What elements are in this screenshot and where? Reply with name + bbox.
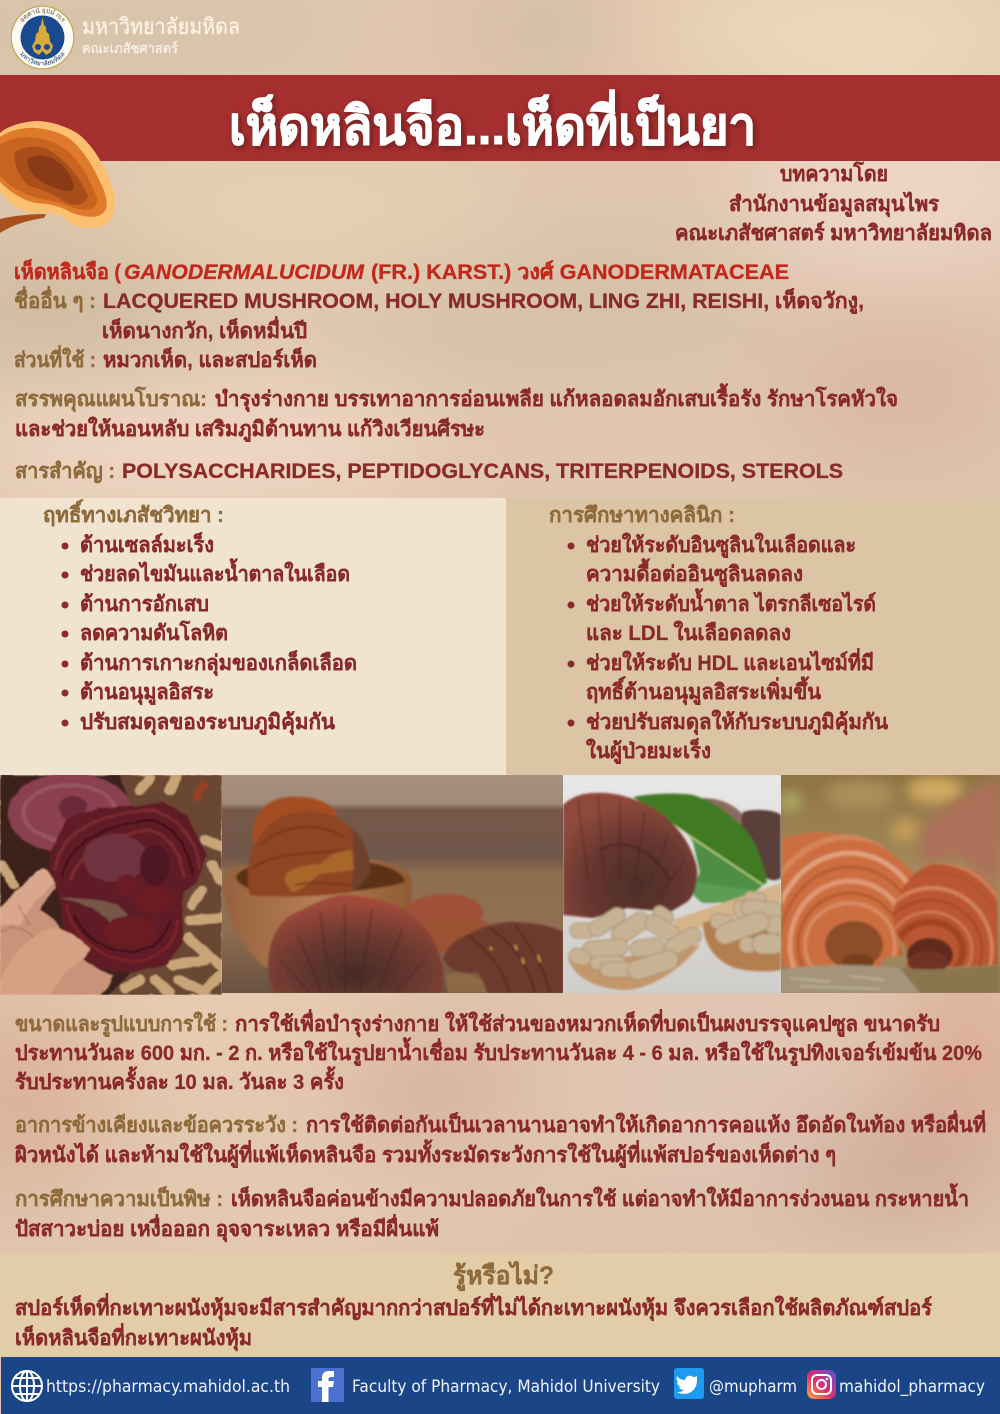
panel: clinical studies: การศึกษาทางคลินิก : [549, 504, 735, 527]
title banner [0, 75, 1000, 161]
photo: hand holding reishi [0, 773, 222, 995]
panel: pharmacology: ต้านเซลล์มะเร็ง [80, 531, 214, 557]
panel: clinical studies: ในผู้ป่วยมะเร็ง [586, 737, 711, 765]
panel: pharmacology: ช่วยลดไขมันและน้ำตาลในเลือด [80, 558, 350, 586]
usage and safety text: การศึกษาความเป็นพิษ : [15, 1185, 223, 1211]
panel: pharmacology: ต้านการเกาะกลุ่มของเกล็ดเลือด [80, 649, 357, 677]
credit: คณะเภสัชศาสตร์ มหาวิทยาลัยมหิดล [675, 221, 992, 245]
panel: did you know: สปอร์เห็ดที่กะเทาะผนังหุ้มจะมีสารสำคัญมากกว่าสปอร์ที่ไม่ได้กะเทาะผนังหุ้ม จึงควรเลือกใช้ผลิตภัณฑ์สปอร์ [15, 1292, 933, 1322]
photo: growing reishi [781, 775, 1000, 993]
monograph text: POLYSACCHARIDES, PEPTIDOGLYCANS, TRITERPENOIDS, STEROLS [122, 460, 843, 483]
panel: clinical studies [506, 498, 1000, 775]
panel: did you know [0, 1253, 1000, 1357]
panel: clinical studies: ช่วยให้ระดับ HDL และเอนไซม์ที่มี [586, 647, 874, 675]
footer bar [1, 1357, 1000, 1414]
panel: clinical studies: ช่วยให้ระดับอินซูลินในเลือดและ [586, 532, 856, 559]
photo: reishi in wooden bowl [222, 775, 563, 993]
university name: คณะเภสัชศาสตร์ [82, 40, 178, 56]
credit: สำนักงานข้อมูลสมุนไพร [729, 191, 940, 218]
monograph text: หมวกเห็ด, และสปอร์เห็ด [103, 346, 317, 372]
usage and safety text: ปัสสาวะบ่อย เหงื่อออก อุจจาระเหลว หรือมีผื่นแพ้ [15, 1213, 439, 1243]
usage and safety text: เห็ดหลินจือค่อนข้างมีความปลอดภัยในการใช้ แต่อาจทำให้มีอาการง่วงนอน กระหายน้ำ [231, 1183, 969, 1211]
monograph text: (FR.) KARST.) วงศ์ GANODERMATACEAE [371, 260, 789, 284]
usage and safety text: อาการข้างเคียงและข้อควรระวัง : [15, 1113, 298, 1137]
monograph text: เห็ดหลินจือ ( [14, 258, 121, 284]
icon: mushroom [0, 121, 115, 233]
usage and safety text: การใช้ติดต่อกันเป็นเวลานานอาจทำให้เกิดอาการคอแห้ง อึดอัดในท้อง หรือผื่นที่ [306, 1109, 986, 1137]
panel: pharmacology [0, 498, 506, 775]
monograph text: และช่วยให้นอนหลับ เสริมภูมิต้านทาน แก้วิงเวียนศีรษะ [15, 416, 485, 443]
monograph text: เห็ดนางกวัก, เห็ดหมื่นปี [102, 315, 307, 343]
icon: facebook [311, 1368, 344, 1402]
monograph text: บำรุงร่างกาย บรรเทาอาการอ่อนเพลีย แก้หลอดลมอักเสบเรื้อรัง รักษาโรคหัวใจ [215, 383, 898, 413]
university name: มหาวิทยาลัยมหิดล [82, 14, 240, 39]
logo: Mahidol University seal: มหาวิทยาลัยมหิดล [20, 52, 65, 66]
icon: globe [12, 1371, 42, 1401]
icon: twitter [674, 1368, 704, 1399]
footer bar: @mupharm [709, 1377, 797, 1396]
panel: clinical studies: ความดื้อต่ออินซูลินลดลง [586, 558, 803, 588]
usage and safety text: รับประทานครั้งละ 10 มล. วันละ 3 ครั้ง [15, 1066, 344, 1094]
monograph text: ส่วนที่ใช้ : [14, 344, 96, 372]
usage and safety text: ประทานวันละ 600 มก. - 2 ก. หรือใช้ในรูปยาน้ำเชื่อม รับประทานวันละ 4 - 6 มล. หรือใช้ในรูปทิงเจอร์เข้มข้น 20% [15, 1037, 982, 1067]
panel: clinical studies: ช่วยปรับสมดุลให้กับระบบภูมิคุ้มกัน [586, 709, 889, 736]
panel: pharmacology: ฤทธิ์ทางเภสัชวิทยา : [43, 499, 224, 527]
footer bar: Faculty of Pharmacy, Mahidol University [352, 1377, 660, 1396]
usage and safety text [14, 1008, 986, 1243]
usage and safety text: ผิวหนังได้ และห้ามใช้ในผู้ที่แพ้เห็ดหลินจือ รวมทั้งระมัดระวังการใช้ในผู้ที่แพ้สปอร์ของเห็ดต่าง ๆ [14, 1139, 836, 1169]
usage and safety text: ขนาดและรูปแบบการใช้ : [15, 1011, 228, 1038]
monograph text [14, 258, 898, 484]
panel: pharmacology: ต้านอนุมูลอิสระ [80, 680, 214, 706]
photo: reishi with capsules [563, 775, 785, 993]
panel: did you know: รู้หรือไม่? [453, 1260, 554, 1292]
panel: pharmacology: ลดความดันโลหิต [80, 620, 228, 645]
credit [675, 161, 992, 245]
monograph text: LACQUERED MUSHROOM, HOLY MUSHROOM, LING ZHI, REISHI, เห็ดจวักงู, [103, 287, 864, 315]
panel: clinical studies: ฤทธิ์ต้านอนุมูลอิสระเพิ่มขึ้น [586, 676, 822, 706]
usage and safety text: การใช้เพื่อบำรุงร่างกาย ให้ใช้ส่วนของหมวกเห็ดที่บดเป็นผงบรรจุแคปซูล ขนาดรับ [235, 1008, 940, 1038]
monograph text: GANODERMALUCIDUM [124, 261, 364, 284]
icon: instagram [807, 1370, 836, 1399]
monograph text: สารสำคัญ : [15, 460, 115, 484]
logo: Mahidol University seal [10, 6, 74, 70]
footer bar: https://pharmacy.mahidol.ac.th [46, 1377, 290, 1396]
title banner: เห็ดหลินจือ...เห็ดที่เป็นยา [229, 90, 756, 156]
monograph text: ชื่ออื่น ๆ : [14, 285, 96, 313]
panel: did you know: เห็ดหลินจือที่กะเทาะผนังหุ้ม [15, 1322, 252, 1352]
credit: บทความโดย [780, 161, 888, 186]
monograph text: สรรพคุณแผนโบราณ: [15, 386, 207, 413]
university name [82, 14, 240, 56]
panel: pharmacology: ต้านการอักเสบ [80, 592, 209, 616]
footer bar: mahidol_pharmacy [839, 1377, 985, 1397]
panel: clinical studies: ช่วยให้ระดับน้ำตาล ไตรกลีเซอไรด์ [586, 588, 876, 616]
panel: pharmacology: ปรับสมดุลของระบบภูมิคุ้มกัน [80, 710, 336, 736]
logo: Mahidol University seal: อตฺตานํ อุปมํ กเร [20, 8, 65, 22]
panel: clinical studies: และ LDL ในเลือดลดลง [586, 620, 791, 645]
